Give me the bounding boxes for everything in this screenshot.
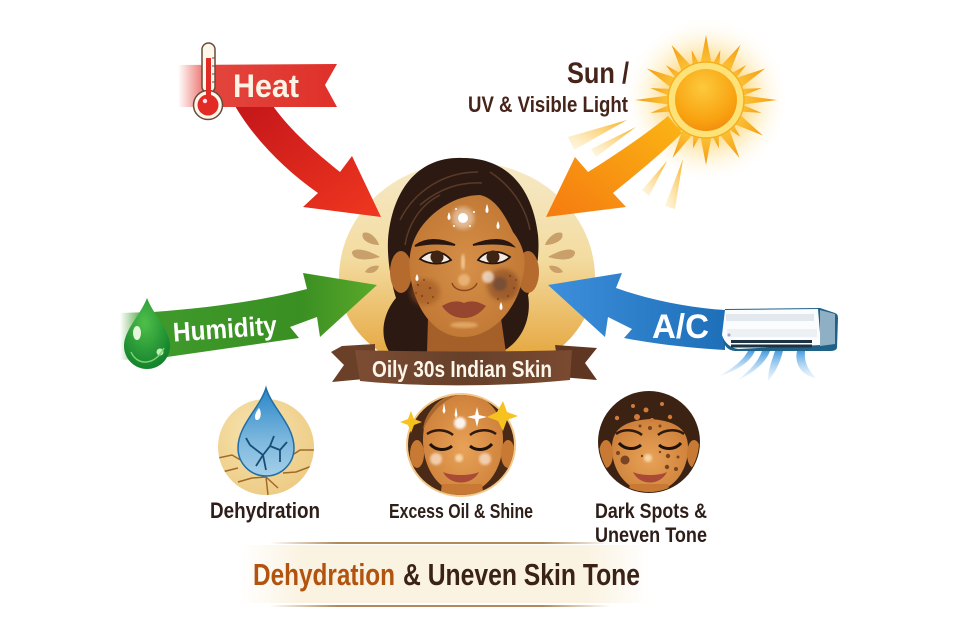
- footer title: Dehydration: [253, 557, 395, 592]
- arrow: sun: [546, 116, 682, 217]
- label: sun: UV & Visible Light: [468, 92, 629, 117]
- icon: cracked earth and water drop: [218, 388, 315, 495]
- ears: [390, 251, 412, 293]
- sun rays: [635, 35, 777, 165]
- hair back: [383, 158, 539, 353]
- heat factor: [178, 43, 381, 217]
- arrow: heat: [235, 106, 381, 217]
- footer title: & Uneven Skin Tone: [403, 557, 640, 592]
- footer title band: [240, 542, 650, 607]
- item: excess oil and shine: [389, 393, 533, 523]
- label: dark spots and uneven tone: Dark Spots &: [595, 500, 707, 523]
- label: sun: [468, 57, 630, 117]
- sun light streaks: [568, 120, 683, 209]
- portrait of woman: [352, 158, 575, 353]
- hair strands: [400, 172, 530, 245]
- label: dehydration: Dehydration: [210, 498, 320, 523]
- label: dark spots and uneven tone: Uneven Tone: [595, 524, 707, 547]
- label: humidity: Humidity: [172, 310, 278, 348]
- item: dark spots and uneven tone: [595, 391, 707, 547]
- banner: heat: [178, 64, 337, 107]
- icon: green drop: [124, 298, 170, 369]
- lips: [442, 301, 486, 318]
- cheek pigmentation: [410, 269, 519, 305]
- sun disc: [668, 62, 744, 138]
- label: dark spots and uneven tone: [595, 500, 707, 547]
- sun glow: [622, 16, 790, 184]
- humidity factor: [120, 273, 377, 369]
- neck: [427, 318, 506, 353]
- icon: thermometer: [194, 43, 222, 120]
- ribbon: oily 30s indian skin: [331, 344, 597, 385]
- icon: gold stars: [400, 401, 518, 433]
- arrow: a/c: [548, 273, 725, 350]
- icon: face with dark spots: [598, 391, 701, 496]
- oil shine highlights: [416, 204, 502, 328]
- nose: [452, 274, 477, 290]
- label: excess oil and shine: Excess Oil & Shine: [389, 501, 533, 523]
- eyes: [420, 250, 510, 264]
- label: a/c: A/C: [652, 308, 709, 346]
- central backdrop circle: [339, 162, 595, 355]
- backdrop splash marks: [352, 232, 575, 273]
- sun factor: [468, 16, 790, 217]
- banner: heat: Heat: [233, 68, 299, 104]
- item: dehydration: [210, 388, 320, 523]
- a/c factor: [548, 273, 838, 381]
- eyebrows: [415, 240, 513, 246]
- icon: air conditioner: [722, 308, 838, 351]
- label: sun: Sun /: [567, 57, 630, 90]
- arrow: humidity: [120, 273, 377, 360]
- icon: shiny face: [406, 393, 516, 498]
- icon: cold air flow: [720, 351, 816, 381]
- ribbon: oily 30s indian skin: Oily 30s Indian Skin: [372, 356, 552, 382]
- face: [409, 195, 525, 337]
